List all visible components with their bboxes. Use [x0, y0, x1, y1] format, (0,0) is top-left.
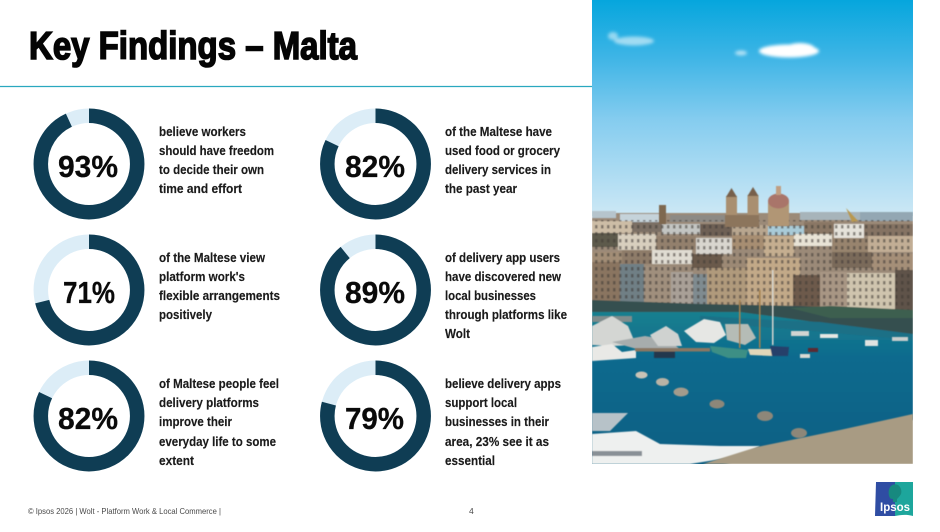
moored boats: [592, 270, 908, 361]
stat: 71% flexible arrangements: [41, 242, 280, 338]
text: discovered businesses: local businesses: [445, 288, 536, 303]
text: everyday life: delivery platforms: [159, 395, 259, 410]
text: flexible arrangements: flexible arrangements: [159, 288, 280, 303]
donut chart: 82%: [41, 368, 137, 464]
donut chart: 89%: [327, 242, 424, 338]
donut chart: 82%: 82%: [345, 149, 405, 184]
footer credit: © Ipsos 2026 | Wolt - Platform Work & Local Commerce |: [28, 506, 221, 516]
donut chart: 71%: 71%: [63, 275, 115, 310]
text: freedom: time and effort: [159, 181, 243, 196]
text: everyday life: everyday life to some: [159, 434, 276, 449]
foreground yacht: [592, 413, 760, 464]
donut chart: 93%: [41, 116, 137, 212]
text: discovered businesses: Wolt: [445, 326, 471, 341]
text: freedom: believe workers: [159, 124, 246, 139]
text: flexible arrangements: [159, 250, 280, 322]
text: flexible arrangements: of the Maltese view: [159, 250, 266, 265]
text: everyday life: extent: [159, 453, 195, 468]
title: Key Findings – Malta: [29, 25, 357, 68]
Ipsos logo: [875, 482, 913, 516]
donut chart: 82%: 82%: [58, 401, 118, 436]
text: used delivery: delivery services in: [445, 162, 551, 177]
donut chart: 79%: [327, 368, 424, 464]
text: discovered businesses: [445, 250, 567, 341]
text: support local: support local: [445, 395, 517, 410]
church towers and dome: [659, 186, 858, 227]
Ipsos logo: Ipsos: [880, 500, 910, 514]
stat: 79% support local: [327, 368, 561, 468]
photo: Malta harbour: [592, 0, 913, 470]
text: discovered businesses: of delivery app users: [445, 250, 560, 265]
donut chart: 93%: 93%: [58, 149, 118, 184]
donut chart: 71%: [41, 242, 137, 338]
page number: 4: [469, 506, 474, 516]
stat: 82% everyday life: [41, 368, 279, 468]
stat: 93% workers freedom: [41, 116, 274, 212]
donut chart: 89%: 89%: [345, 275, 405, 310]
text: discovered businesses: have discovered new: [445, 269, 562, 284]
foreground rock wall: [703, 414, 913, 464]
text: freedom: [159, 124, 274, 196]
mooring buoys: [636, 372, 807, 438]
text: support local: believe delivery apps: [445, 376, 561, 391]
text: used delivery: used food or grocery: [445, 143, 561, 158]
text: discovered businesses: through platforms like: [445, 307, 567, 322]
text: support local: [445, 376, 561, 468]
donut chart: 79%: 79%: [345, 401, 404, 436]
text: flexible arrangements: platform work's: [159, 269, 245, 284]
stat: 82% used delivery: [327, 116, 561, 212]
text: freedom: should have freedom: [159, 143, 274, 158]
text: support local: businesses in their: [445, 414, 549, 429]
text: flexible arrangements: positively: [159, 307, 213, 322]
text: used delivery: the past year: [445, 181, 517, 196]
text: everyday life: of Maltese people feel: [159, 376, 279, 391]
donut chart: 82%: [327, 116, 424, 212]
text: support local: essential: [445, 453, 495, 468]
text: used delivery: of the Maltese have: [445, 124, 552, 139]
text: freedom: to decide their own: [159, 162, 264, 177]
text: used delivery: [445, 124, 561, 196]
text: everyday life: improve their: [159, 414, 232, 429]
stat: 89% discovered businesses: [327, 242, 567, 341]
text: everyday life: [159, 376, 279, 468]
text: support local: area, 23% see it as: [445, 434, 549, 449]
